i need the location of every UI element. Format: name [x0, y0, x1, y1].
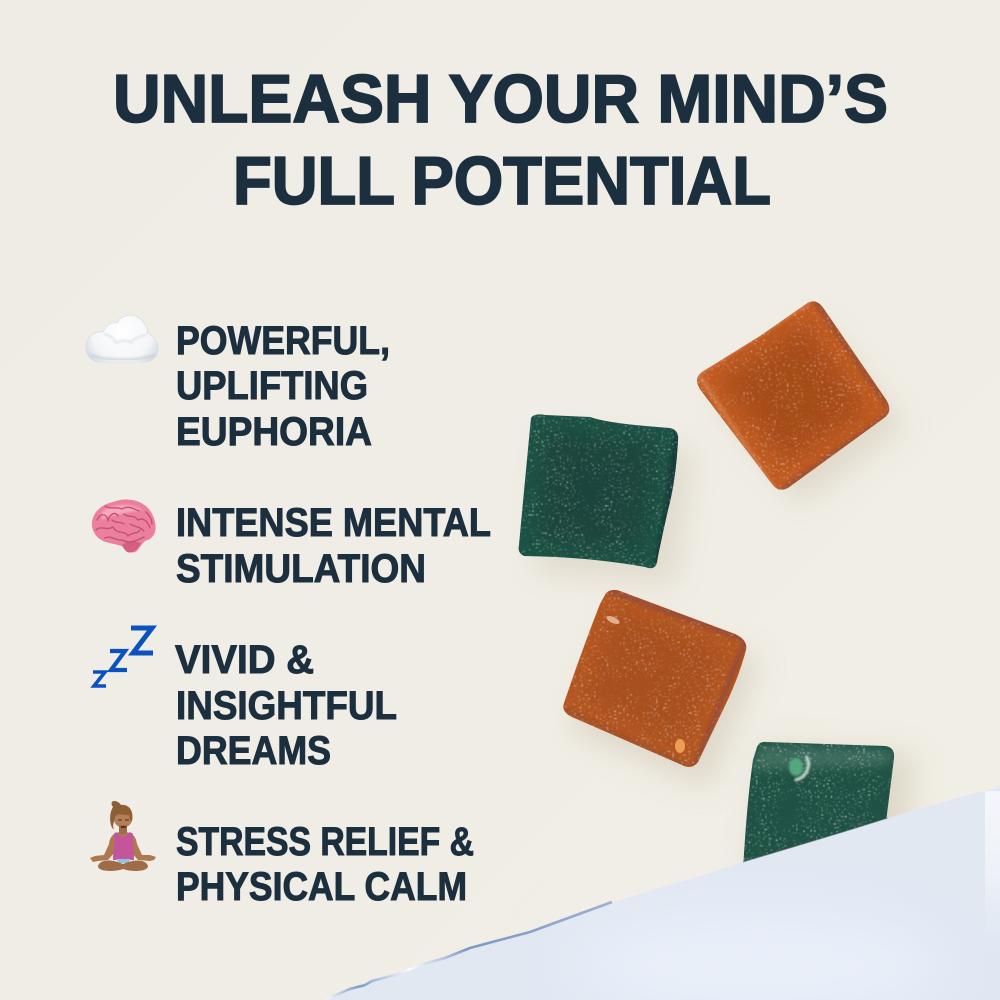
title: FULL POTENTIAL [233, 143, 771, 219]
icon: sleeping zzz [93, 628, 153, 686]
benefit: powerful, uplifting euphoria: EUPHORIA [176, 410, 372, 454]
gummy: orange middle [560, 585, 760, 788]
gummy: orange top right [690, 295, 905, 505]
icon: brain [92, 499, 156, 553]
benefit: stress relief and physical calm: PHYSICAL CALM [176, 865, 467, 909]
benefit: powerful, uplifting euphoria: POWERFUL, [176, 319, 390, 363]
title [113, 61, 888, 219]
benefit: vivid and insightful dreams: INSIGHTFUL [176, 684, 397, 728]
benefits list [175, 319, 491, 909]
benefit: vivid and insightful dreams [175, 638, 397, 773]
benefit: vivid and insightful dreams: VIVID & [175, 638, 314, 682]
benefit: powerful, uplifting euphoria [176, 319, 390, 454]
benefit: powerful, uplifting euphoria: UPLIFTING [176, 364, 368, 408]
benefit: intense mental stimulation [176, 501, 491, 591]
benefit: intense mental stimulation: INTENSE MENTAL [176, 501, 491, 545]
icon: meditating person [90, 801, 156, 871]
icon: cloud [86, 315, 158, 362]
benefit: stress relief and physical calm: STRESS RELIEF & [176, 820, 474, 864]
title: UNLEASH YOUR MIND’S [113, 61, 888, 137]
benefit: intense mental stimulation: STIMULATION [176, 547, 426, 591]
gummy: green left [515, 410, 695, 585]
benefit: stress relief and physical calm [176, 820, 474, 909]
package pouch corner [327, 787, 1000, 1000]
benefit: vivid and insightful dreams: DREAMS [176, 729, 331, 773]
gummy: green lower, tucked into bag [744, 739, 920, 862]
